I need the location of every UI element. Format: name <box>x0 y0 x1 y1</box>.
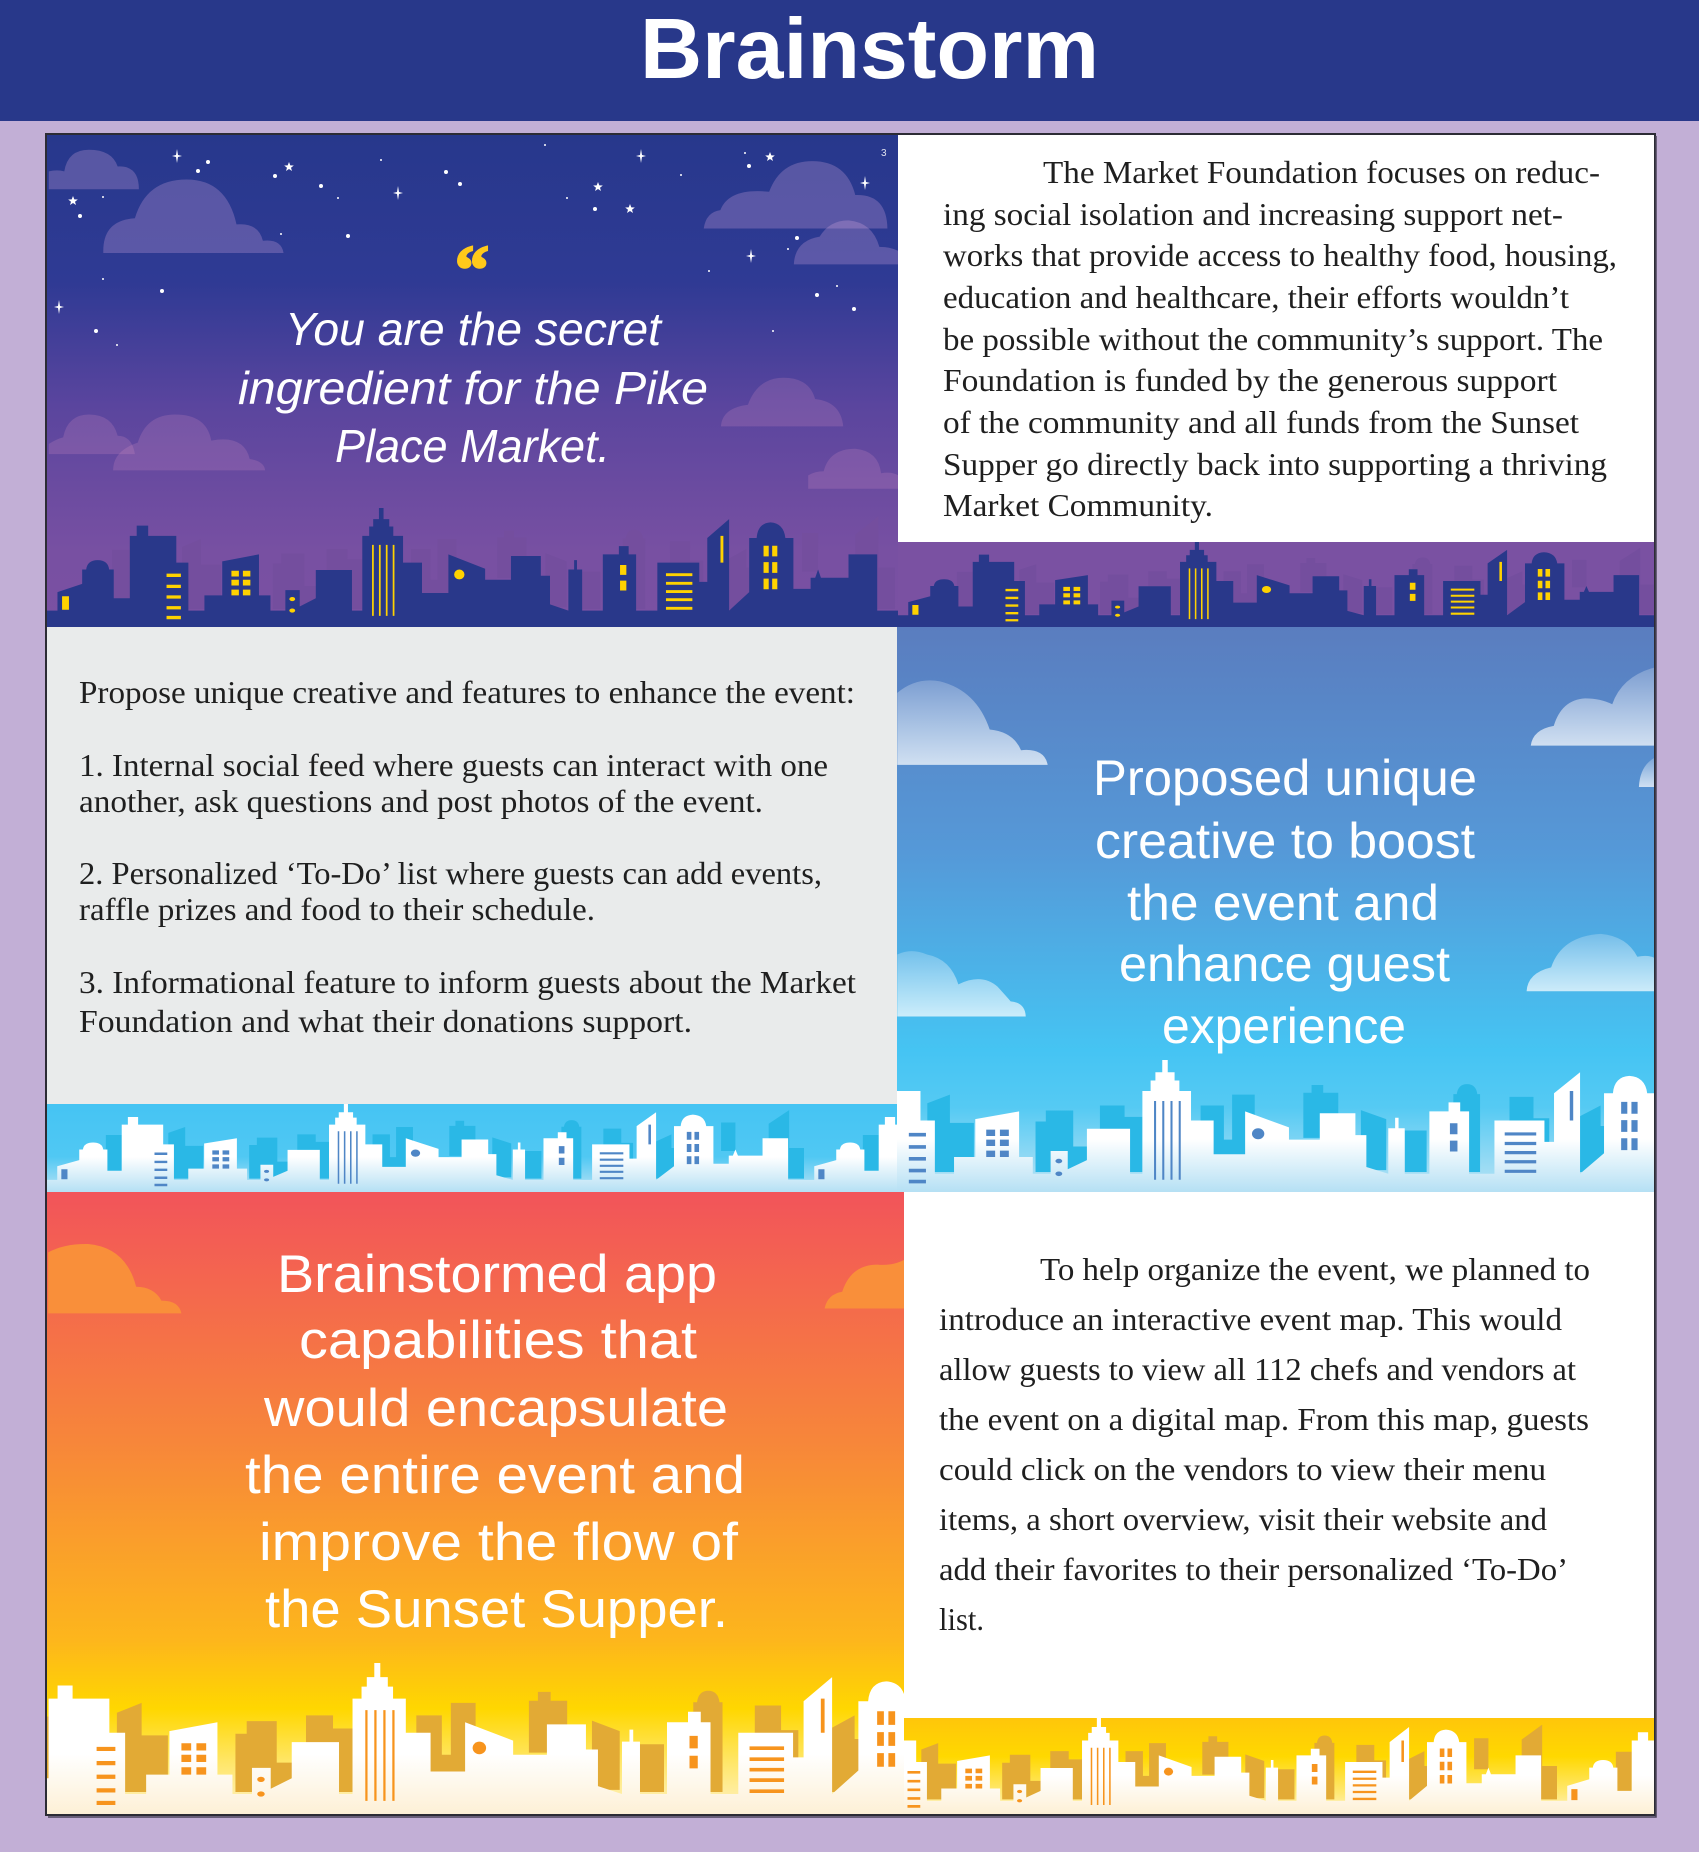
heading text: would encapsulate <box>263 1379 728 1438</box>
list text <box>79 674 856 1039</box>
heading text: experience <box>1162 998 1406 1054</box>
clouds <box>49 150 898 489</box>
paragraph: the event on a digital map. From this map, guests <box>939 1401 1589 1437</box>
panel: event map text <box>800 1192 1699 1814</box>
panel: Market Foundation text <box>898 134 1655 627</box>
paragraph: introduce an interactive event map. This would <box>939 1301 1562 1337</box>
list text: raffle prizes and food to their schedule. <box>79 891 595 927</box>
paragraph: The Market Foundation focuses on reduc- <box>1043 154 1600 190</box>
list text: 2. Personalized ‘To-Do’ list where guests can add events, <box>79 855 822 891</box>
quote text: You are the secret <box>285 303 663 355</box>
list text: 3. Informational feature to inform guests about the Market <box>79 964 856 1000</box>
paragraph: be possible without the community’s support. The <box>943 321 1603 357</box>
paragraph: add their favorites to their personalized ‘To-Do’ <box>939 1551 1568 1587</box>
panel: blue proposed creative <box>765 627 1699 1192</box>
heading text: enhance guest <box>1119 936 1450 992</box>
heading text: Brainstormed app <box>277 1245 717 1304</box>
paragraph: could click on the vendors to view their menu <box>939 1451 1546 1487</box>
list text: 1. Internal social feed where guests can interact with one <box>79 747 828 783</box>
paragraph: works that provide access to healthy food, housing, <box>943 237 1617 273</box>
paragraph <box>943 154 1617 523</box>
paragraph: allow guests to view all 112 chefs and vendors at <box>939 1351 1576 1387</box>
paragraph: education and healthcare, their efforts wouldn’t <box>943 279 1569 315</box>
list text: Foundation and what their donations support. <box>79 1003 692 1039</box>
white skyline <box>897 1060 1654 1187</box>
header band with title <box>0 0 1699 121</box>
clouds <box>897 668 1654 1016</box>
paragraph: Supper go directly back into supporting a thriving <box>943 446 1607 482</box>
page number: 3 <box>881 148 887 159</box>
title: Brainstorm <box>640 2 1099 97</box>
cream skyline <box>47 1663 904 1814</box>
paragraph: list. <box>939 1601 984 1637</box>
icon: quotation mark: “ <box>455 231 489 307</box>
heading text: improve the flow of <box>259 1513 738 1572</box>
clouds <box>48 1244 904 1313</box>
night skyline <box>47 508 898 627</box>
heading text: creative to boost <box>1095 813 1475 869</box>
panel: night quote <box>46 134 1699 627</box>
paragraph: of the community and all funds from the Sunset <box>943 404 1579 440</box>
heading text: the Sunset Supper. <box>265 1580 728 1639</box>
paragraph <box>939 1251 1590 1637</box>
panel: orange brainstormed capabilities <box>0 1192 1049 1815</box>
paragraph: items, a short overview, visit their website and <box>939 1501 1547 1537</box>
paragraph: ing social isolation and increasing support net- <box>943 196 1563 232</box>
heading text <box>1093 750 1477 1054</box>
quote text <box>238 303 708 472</box>
list text: Propose unique creative and features to enhance the event: <box>79 674 855 710</box>
quote text: ingredient for the Pike <box>238 362 708 414</box>
heading text: the entire event and <box>245 1446 745 1505</box>
stars <box>54 144 870 346</box>
heading text <box>245 1245 745 1639</box>
panel: creative features list <box>46 627 1561 1192</box>
list text: another, ask questions and post photos of the event. <box>79 783 763 819</box>
blue skyline strip <box>47 1104 897 1192</box>
paragraph: Market Community. <box>943 487 1213 523</box>
paragraph: To help organize the event, we planned to <box>1040 1251 1590 1287</box>
yellow skyline strip <box>904 1718 1654 1814</box>
paragraph: Foundation is funded by the generous support <box>943 362 1557 398</box>
heading text: capabilities that <box>299 1311 697 1370</box>
heading text: Proposed unique <box>1093 750 1477 806</box>
quote text: Place Market. <box>335 420 610 472</box>
heading text: the event and <box>1127 875 1439 931</box>
purple skyline strip <box>898 542 1654 627</box>
